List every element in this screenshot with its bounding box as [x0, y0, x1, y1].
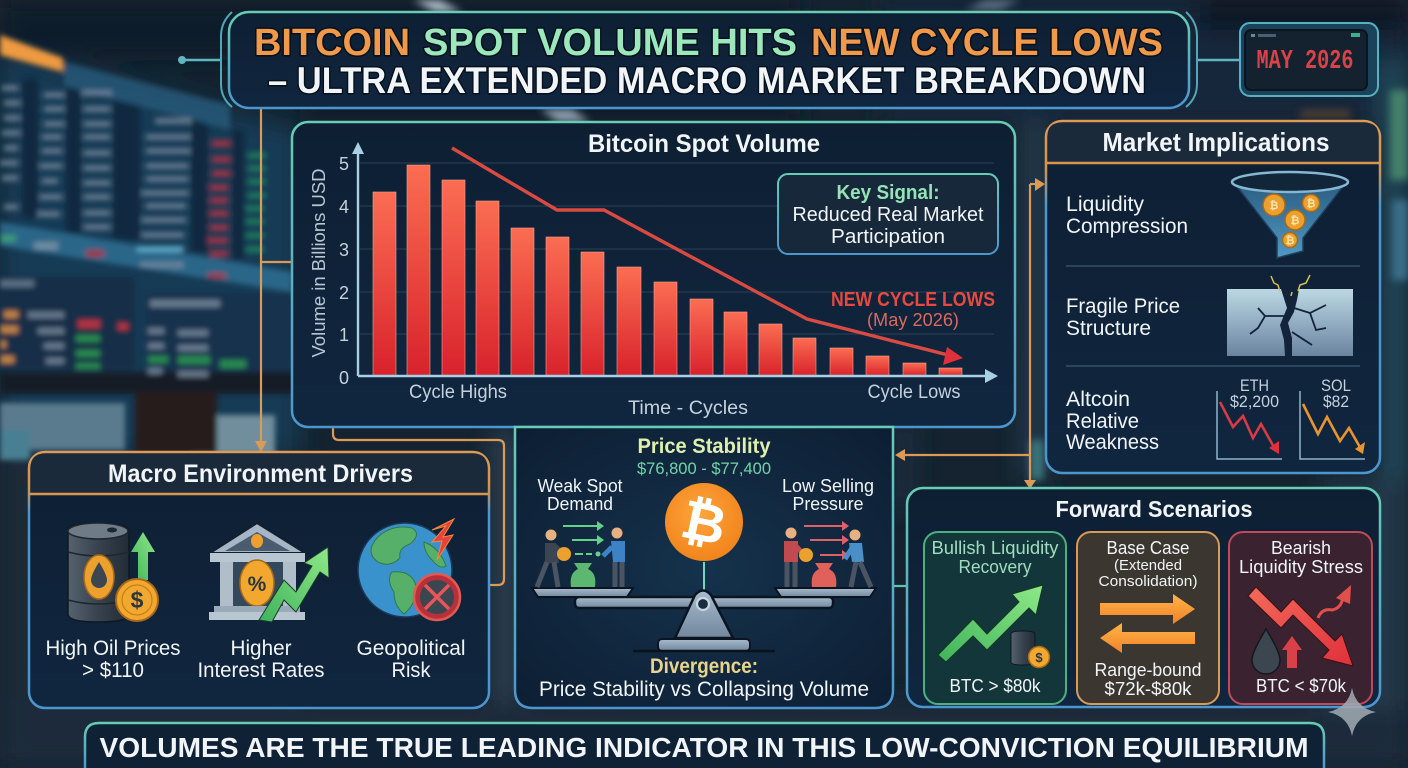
- trend line arrow: [452, 148, 963, 365]
- icon: bitcoin coin: [665, 483, 743, 561]
- lower screens: [0, 277, 135, 370]
- icon: bank with growth arrow: %: [248, 573, 267, 596]
- label: low selling pressure: [782, 476, 874, 514]
- card: bullish: Recovery: [958, 557, 1032, 577]
- chart: SOL mini: $82: [1323, 392, 1349, 411]
- panel: macro environment drivers: [29, 452, 489, 708]
- title line one: BITCOIN: [254, 22, 410, 64]
- labels: drivers: > $110: [82, 659, 144, 682]
- icon: oil drop: [1252, 629, 1280, 674]
- price stability heading: $76,800 - $77,400: [637, 459, 771, 478]
- heading: Market Implications: [1102, 127, 1330, 157]
- y axis ticks: 1: [339, 325, 349, 345]
- icon: cracked surface: [1227, 275, 1353, 356]
- callout: new cycle lows: (May 2026): [867, 310, 959, 330]
- title line one: [254, 22, 1163, 64]
- icon: sparkle watermark: [1328, 688, 1376, 736]
- icon: globe with risk symbols: [358, 519, 460, 620]
- card: base case: $72k-$80k: [1104, 679, 1193, 699]
- chart: ETH mini: ETH: [1240, 376, 1269, 395]
- item: altcoin relative weakness: Weakness: [1066, 431, 1159, 454]
- y axis ticks: 5: [339, 154, 349, 174]
- card: bearish: Bearish: [1271, 538, 1331, 558]
- icon: red down arrow: [1248, 587, 1353, 666]
- arrows: orange flow connectors: [255, 108, 1045, 586]
- callout: new cycle lows: NEW CYCLE LOWS: [831, 289, 995, 311]
- icon: oil barrel with coin: $: [131, 587, 144, 613]
- price stability heading: Price Stability: [638, 435, 771, 458]
- card: bullish: BTC > $80k: [950, 676, 1041, 696]
- figures: left buyers: [537, 521, 625, 587]
- item: altcoin relative weakness: Relative: [1066, 410, 1139, 433]
- callout: key signal: Participation: [831, 226, 945, 248]
- axis labels: Cycle Lows: [868, 382, 960, 403]
- title banner: [221, 12, 1197, 108]
- icon: bitcoin coin: ₿: [676, 489, 732, 557]
- bottom takeaway banner: VOLUMES ARE THE TRUE LEADING INDICATOR IN THIS LOW-CONVICTION EQUILIBRIUM: [100, 732, 1308, 763]
- axis labels: Cycle Highs: [409, 382, 507, 403]
- chart heading: Bitcoin Spot Volume: [588, 130, 820, 158]
- figures: right sellers: [784, 521, 871, 587]
- item: altcoin relative weakness: Altcoin: [1066, 388, 1130, 411]
- icon: mini barrel and coin: $: [1035, 650, 1043, 665]
- label: weak spot demand: Demand: [547, 494, 613, 514]
- y axis ticks: 0: [339, 368, 349, 388]
- axis labels: [409, 382, 960, 419]
- heading: Forward Scenarios: [1056, 496, 1252, 522]
- y axis title: Volume in Billions USD: [309, 168, 329, 358]
- title line one: NEW CYCLE LOWS: [811, 22, 1163, 64]
- y axis ticks: 3: [339, 240, 349, 260]
- card: base case: Consolidation): [1098, 573, 1198, 590]
- item: fragile price structure: Structure: [1066, 317, 1151, 340]
- bars: [373, 165, 962, 376]
- callout: new cycle lows: [831, 289, 995, 330]
- callout: key signal: Reduced Real Market: [792, 204, 984, 226]
- callout: key signal: Key Signal:: [836, 182, 940, 204]
- y axis ticks: [339, 154, 349, 388]
- title line two: – ULTRA EXTENDED MACRO MARKET BREAKDOWN: [268, 60, 1146, 101]
- icon: small up arrow: [1282, 636, 1302, 668]
- y axis ticks: 2: [339, 283, 349, 303]
- icon: small red arrow: [1318, 585, 1351, 618]
- icon: funnel with coins: ₿: [1286, 235, 1295, 247]
- item: liquidity compression: [1066, 193, 1188, 238]
- chart: SOL mini: [1300, 376, 1365, 459]
- axes: [352, 142, 998, 383]
- icon: funnel with coins: [1232, 172, 1348, 258]
- panel: market implications: [1046, 121, 1380, 473]
- chart: ETH mini: $2,200: [1230, 392, 1279, 411]
- item: fragile price structure: [1066, 295, 1180, 340]
- connector: title to left node: [178, 56, 1240, 64]
- card: base case: Range-bound: [1094, 660, 1202, 680]
- axis labels: Time - Cycles: [628, 398, 748, 419]
- icon: bank with growth arrow: [209, 523, 329, 622]
- icon: oil barrel with coin: [68, 523, 158, 622]
- title line one: SPOT VOLUME HITS: [423, 22, 797, 64]
- panel: forward scenarios: [907, 488, 1380, 707]
- item: liquidity compression: Compression: [1066, 215, 1188, 238]
- balance scale: [532, 562, 876, 651]
- gridlines: [360, 163, 994, 334]
- divergence text: Price Stability vs Collapsing Volume: [539, 678, 869, 701]
- card: base case: Base Case: [1106, 538, 1190, 558]
- labels: drivers: [46, 637, 466, 682]
- heading: Macro Environment Drivers: [108, 460, 413, 488]
- labels: drivers: Higher: [230, 637, 292, 660]
- panel: bitcoin spot volume chart: [292, 122, 1015, 427]
- icon: range arrows: [1100, 594, 1195, 653]
- divergence text: Divergence:: [650, 655, 758, 678]
- callout: key signal: [778, 174, 998, 254]
- panel: price stability balance: [515, 427, 893, 708]
- labels: drivers: High Oil Prices: [46, 637, 180, 660]
- labels: drivers: Geopolitical: [356, 637, 466, 660]
- labels: drivers: Risk: [392, 659, 431, 682]
- item: fragile price structure: Fragile Price: [1066, 295, 1180, 318]
- card: base case: [1077, 532, 1219, 704]
- chart: SOL mini: SOL: [1321, 376, 1351, 395]
- chart: ETH mini: [1217, 376, 1282, 459]
- item: altcoin relative weakness: [1066, 388, 1159, 454]
- label: low selling pressure: Low Selling: [782, 476, 874, 496]
- date display widget: MAY 2026: [1256, 47, 1354, 77]
- label: weak spot demand: Weak Spot: [538, 476, 622, 496]
- y axis ticks: 4: [339, 197, 349, 217]
- bottom takeaway banner: [85, 723, 1324, 768]
- divergence text: [539, 655, 869, 701]
- card: bearish: [1229, 532, 1372, 704]
- card: bearish: Liquidity Stress: [1239, 557, 1363, 577]
- column rows: [0, 85, 191, 268]
- price stability heading: [637, 435, 771, 478]
- item: liquidity compression: Liquidity: [1066, 193, 1144, 216]
- card: bullish: [924, 532, 1066, 704]
- card: bearish: BTC < $70k: [1256, 676, 1347, 696]
- label: weak spot demand: [538, 476, 622, 514]
- labels: drivers: Interest Rates: [198, 659, 324, 682]
- icon: green up arrow: [938, 585, 1043, 662]
- card: bullish: Bullish Liquidity: [932, 538, 1058, 558]
- icon: mini barrel and coin: [1011, 631, 1050, 668]
- icon: funnel with coins: ₿: [1307, 198, 1316, 210]
- card: base case: (Extended: [1114, 557, 1182, 574]
- dark columns: [22, 78, 244, 260]
- icon: funnel with coins: ₿: [1270, 200, 1279, 212]
- date display widget: [1240, 23, 1378, 96]
- label: low selling pressure: Pressure: [792, 494, 864, 514]
- icon: funnel with coins: ₿: [1291, 215, 1300, 227]
